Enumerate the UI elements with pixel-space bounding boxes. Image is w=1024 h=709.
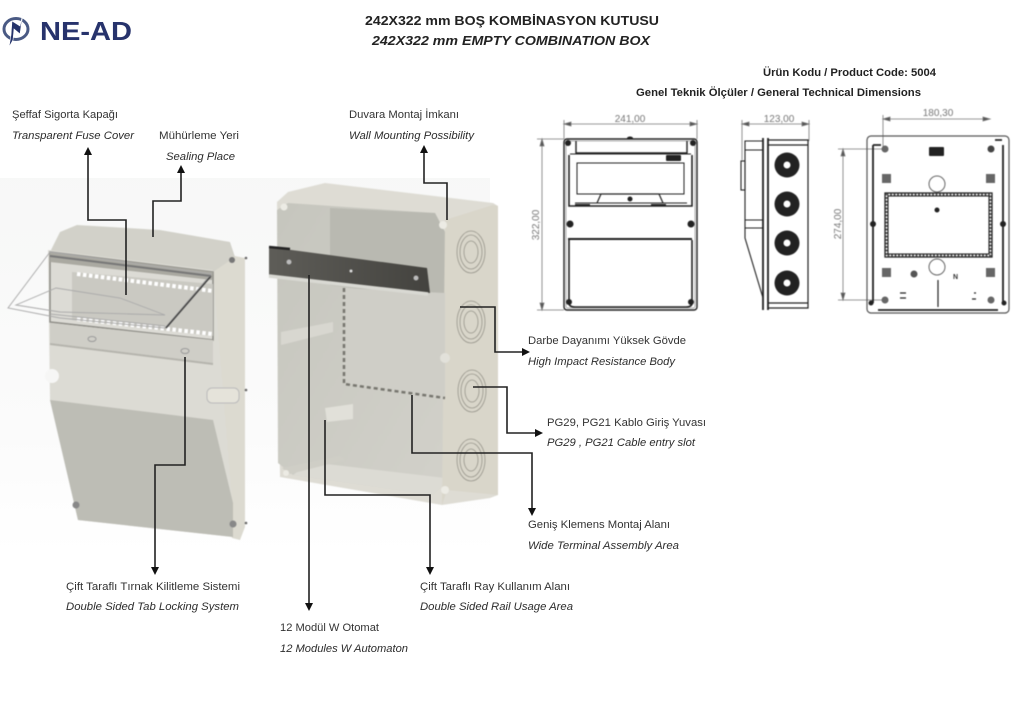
seal notch [45, 369, 59, 383]
arrow: sealing place [153, 165, 185, 237]
arrow: high impact body [460, 307, 530, 356]
label: 12 modules: 12 Modules W Automaton [280, 643, 408, 655]
label: rail usage: Çift Taraflı Ray Kullanım Alanı [420, 581, 570, 593]
terminal mounting plate [343, 288, 445, 397]
label: wall mounting: Duvara Montaj İmkanı [349, 108, 459, 121]
label: transparent fuse cover: Transparent Fuse Cover [12, 130, 135, 142]
side knockouts [774, 152, 800, 296]
title: 242X322 mm EMPTY COMBINATION BOX [371, 33, 651, 48]
label: 12 modules [280, 622, 408, 655]
module openings rows [77, 274, 213, 291]
label: cable entry: PG29, PG21 Kablo Giriş Yuvası [547, 417, 706, 429]
label: terminal area: Geniş Klemens Montaj Alanı [528, 519, 670, 531]
drawing: side view [741, 114, 809, 310]
drawing: front view [531, 114, 697, 310]
photo background [0, 178, 490, 553]
label: 12 modules: 12 Modül W Otomat [280, 622, 379, 634]
arrow: tab locking [151, 357, 185, 575]
fuse window [50, 252, 213, 340]
drawing: back view [833, 108, 1009, 313]
dimension width [564, 114, 697, 139]
dimension mount height: 274,00 [833, 208, 844, 239]
label: high impact [528, 335, 686, 368]
dimension height [531, 139, 564, 310]
dimension height: 322,00 [531, 209, 542, 240]
front details [565, 136, 696, 305]
label: wall mounting [349, 108, 476, 142]
hinge tab [207, 388, 239, 403]
back outline [867, 136, 1009, 313]
logo: NE-AD [4, 13, 132, 47]
locking band [50, 323, 213, 363]
dimension depth: 123,00 [764, 114, 795, 125]
arrow: transparent fuse cover [84, 147, 126, 295]
label: cable entry [547, 417, 706, 449]
logo wordmark: NE-AD [40, 16, 132, 46]
knockouts [457, 231, 486, 481]
transparent fuse cover [8, 252, 211, 328]
label: tab locking [66, 581, 240, 613]
label: transparent fuse cover: Şeffaf Sigorta Kapağı [12, 109, 118, 121]
product render: open box with rail [269, 183, 498, 505]
din rail [269, 247, 430, 294]
label: rail usage: Double Sided Rail Usage Area [420, 601, 573, 613]
label: sealing place: Mühürleme Yeri [159, 130, 239, 142]
screws [72, 502, 80, 508]
arrow: cable entry slot [473, 387, 543, 437]
label: wall mounting: Wall Mounting Possibility [349, 130, 476, 142]
arrow: terminal assembly area [412, 395, 536, 516]
label: sealing place [159, 130, 239, 163]
dimension mount height [833, 149, 884, 300]
title: 242X322 mm BOŞ KOMBİNASYON KUTUSU [365, 13, 659, 28]
label: tab locking: Double Sided Tab Locking System [66, 601, 239, 613]
arrow: double sided rail [325, 420, 434, 575]
label: terminal area: Wide Terminal Assembly Area [528, 540, 679, 552]
label: terminal area [528, 519, 679, 552]
label: rail usage [420, 581, 573, 613]
product render: front box with open cover [8, 225, 247, 540]
title [365, 13, 659, 48]
box side wall [213, 250, 245, 540]
side outline [741, 138, 808, 310]
arrow: wall mounting [420, 145, 447, 220]
label: high impact: Darbe Dayanımı Yüksek Gövde [528, 335, 686, 347]
icon: logo ring with bolt [4, 13, 28, 47]
outer shell [277, 183, 498, 505]
side wall with knockouts [442, 205, 498, 505]
dimension mount width [883, 108, 990, 147]
box top face [50, 225, 235, 272]
interior floor [293, 462, 445, 495]
label: sealing place: Sealing Place [166, 151, 235, 163]
product code: Ürün Kodu / Product Code: 5004 [763, 66, 937, 79]
dimension mount width: 180,30 [923, 108, 954, 119]
back details: N [953, 274, 958, 281]
dimension width: 241,00 [615, 114, 646, 125]
box mid panel [48, 250, 233, 537]
label: cable entry: PG29 , PG21 Cable entry slot [547, 437, 696, 449]
arrow: 12 modules [305, 275, 313, 611]
back details [868, 146, 1006, 306]
bosses and posts [281, 322, 333, 345]
front outline [564, 139, 697, 310]
label: transparent fuse cover [12, 109, 135, 142]
technical dimensions heading: Genel Teknik Ölçüler / General Technical Dimensions [636, 86, 921, 99]
label: tab locking: Çift Taraflı Tırnak Kilitleme Sistemi [66, 581, 240, 593]
interior [277, 203, 445, 495]
lower sloped face [50, 400, 233, 537]
dimension depth [742, 114, 809, 160]
label: high impact: High Impact Resistance Body [528, 356, 677, 368]
